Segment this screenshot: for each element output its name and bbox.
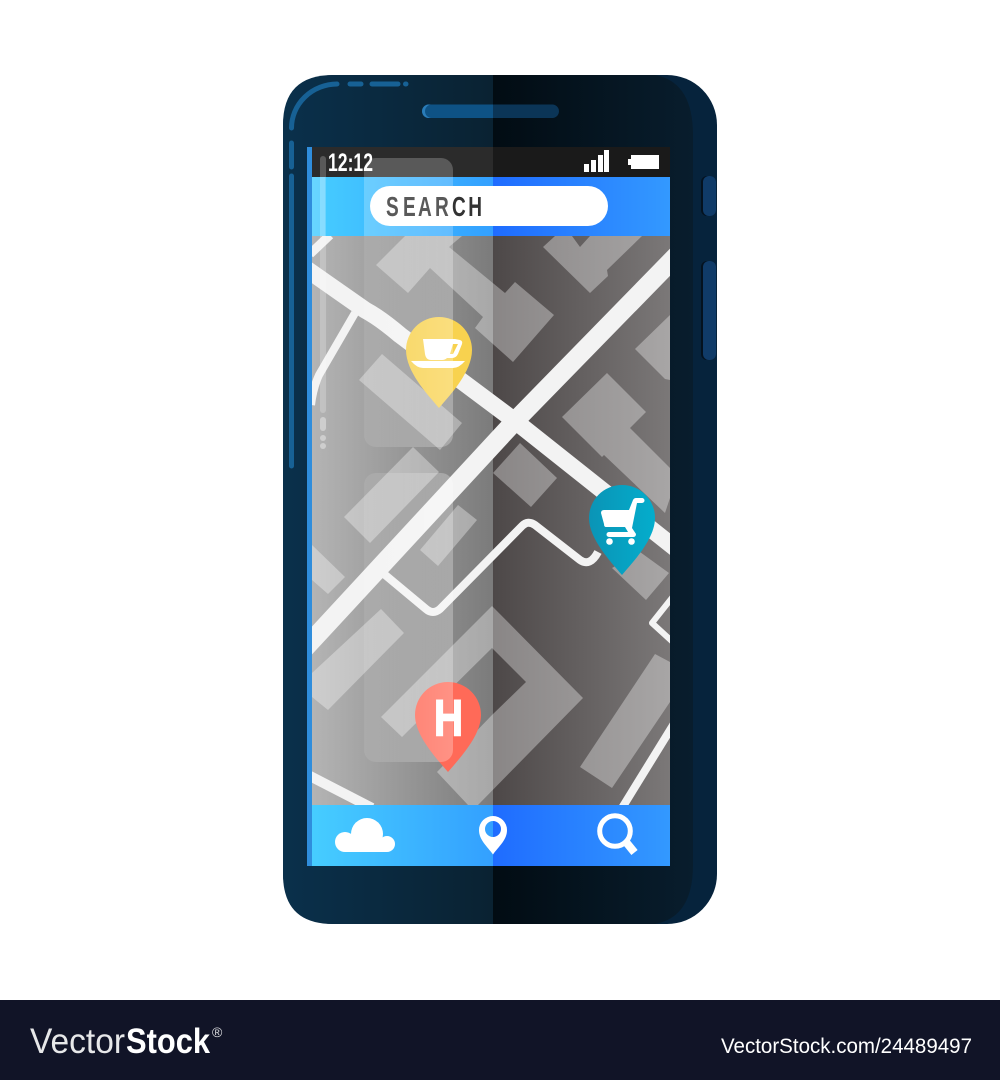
search label: SEAR bbox=[386, 191, 449, 223]
signal bars bbox=[584, 150, 609, 172]
glass panels bbox=[312, 158, 453, 762]
icon: location pin bbox=[479, 816, 507, 854]
screen edge bbox=[307, 147, 312, 866]
brand logo: Vector bbox=[30, 1022, 125, 1061]
brand logo bbox=[30, 1022, 210, 1061]
roads bbox=[305, 235, 680, 808]
pin: shopping bbox=[589, 485, 655, 575]
left edge highlights bbox=[292, 84, 406, 466]
glass reflection strip bbox=[320, 156, 326, 449]
speaker bbox=[422, 104, 559, 118]
phone body bbox=[283, 75, 717, 924]
pin: coffee bbox=[406, 317, 472, 408]
icon: H letter: H bbox=[434, 690, 463, 746]
buildings bbox=[312, 236, 670, 805]
footer bar bbox=[0, 1000, 1000, 1080]
icon: cup bbox=[411, 339, 465, 368]
icon: cart bbox=[601, 498, 645, 545]
screen bbox=[305, 147, 680, 866]
brand logo: Stock bbox=[126, 1022, 210, 1061]
search field bbox=[370, 186, 608, 226]
icon: magnifier bbox=[600, 816, 634, 852]
search label: CH bbox=[452, 191, 482, 223]
icon: cloud bbox=[335, 818, 395, 852]
clock: 12:12 bbox=[328, 149, 373, 177]
status bar bbox=[312, 147, 670, 177]
image id: VectorStock.com/24489497 bbox=[721, 1035, 972, 1058]
top bar bbox=[312, 177, 670, 236]
battery bbox=[628, 155, 659, 169]
pin: hospital bbox=[415, 682, 481, 772]
side buttons bbox=[701, 176, 716, 360]
registered mark: ® bbox=[212, 1024, 223, 1040]
map bbox=[305, 235, 680, 808]
bottom bar bbox=[312, 805, 670, 866]
